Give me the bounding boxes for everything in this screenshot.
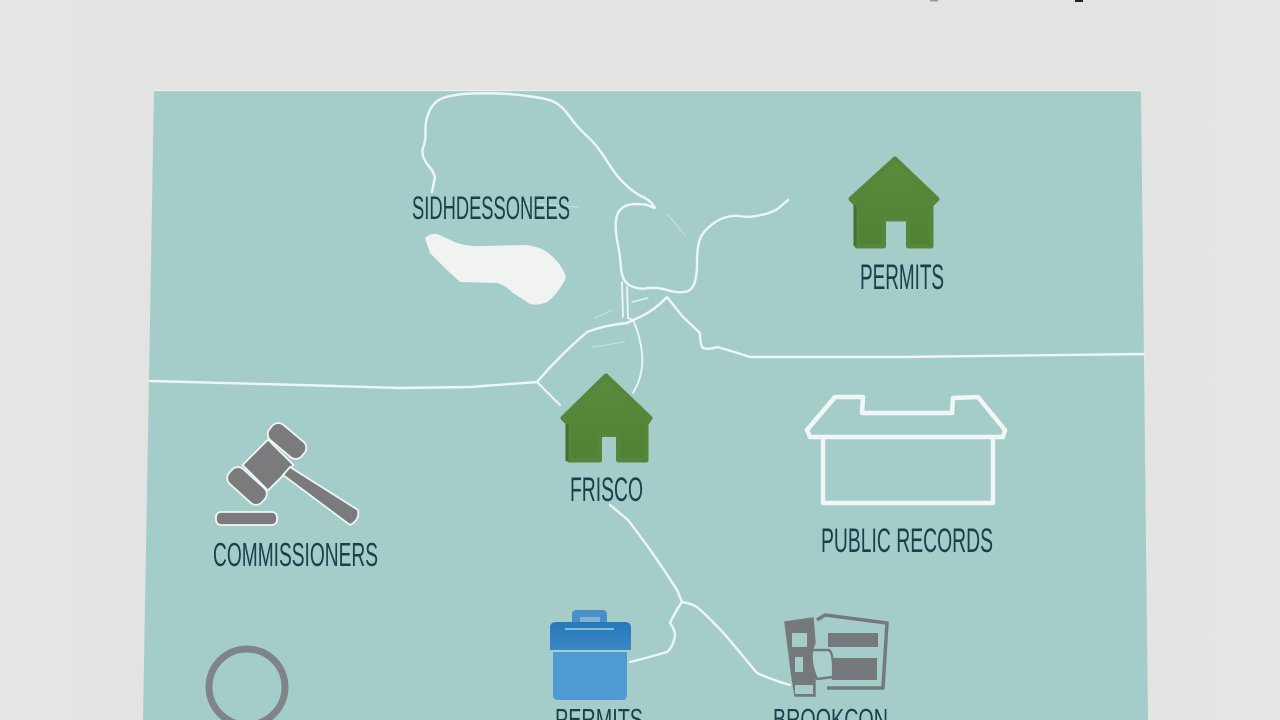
clipped title fragments at top edge <box>930 0 1083 2</box>
map: white lake <box>425 234 566 305</box>
icon: document and phone <box>785 615 887 696</box>
icon: gavel <box>216 420 358 525</box>
text: Frisco label: FRISCO <box>570 471 643 509</box>
map: road network <box>150 93 1144 685</box>
text: public records label: PUBLIC RECORDS <box>821 522 993 560</box>
icon: white outlined building <box>807 397 1005 503</box>
icon: green house centre <box>563 376 650 461</box>
icon: grey circle <box>209 649 285 720</box>
text: commissioners label: COMMISSIONERS <box>213 536 378 573</box>
text: garbled top label: SIDHDESSONEES <box>412 190 570 226</box>
panel: teal map <box>143 90 1148 720</box>
icon: blue briefcase <box>550 610 631 700</box>
text: permits label: PERMITS <box>860 258 944 297</box>
icon: green house top right <box>851 159 937 246</box>
